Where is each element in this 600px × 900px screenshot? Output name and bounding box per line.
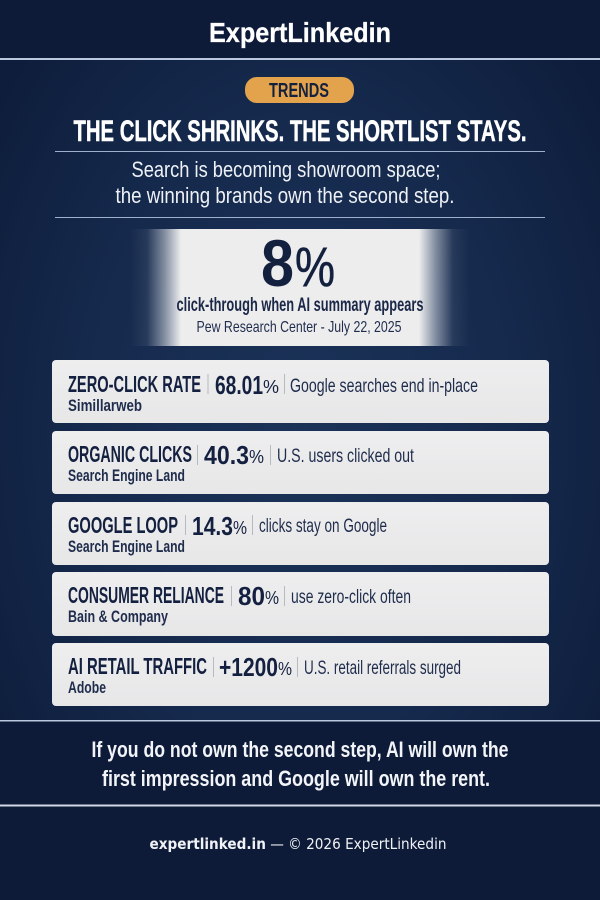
hero number: 8% <box>261 226 335 300</box>
hero source: Pew Research Center - July 22, 2025 <box>196 319 402 336</box>
stat card: zero-click rate: Google searches end in-place <box>290 376 478 397</box>
stat card: ai retail traffic <box>52 643 549 706</box>
stat card: organic clicks: 40.3 <box>204 440 249 470</box>
hero number: 8%: 8 <box>261 226 294 300</box>
stat card: ai retail traffic: % <box>278 659 292 679</box>
header band <box>0 0 600 58</box>
stat card: consumer reliance <box>52 572 549 636</box>
stat card: consumer reliance: Bain & Company <box>68 607 168 626</box>
stat card: zero-click rate: 68.01 <box>215 370 263 400</box>
stat card: google loop: % <box>233 518 247 538</box>
stat card: zero-click rate <box>52 360 549 423</box>
hero number: 8%: % <box>295 235 335 298</box>
stat card: organic clicks: Search Engine Land <box>68 466 185 485</box>
stat card: ai retail traffic: AI RETAIL TRAFFIC <box>68 653 207 679</box>
stat card: consumer reliance: % <box>265 588 279 608</box>
stat card: google loop: 14.3 <box>192 511 233 541</box>
subtitle: the winning brands own the second step. <box>116 183 454 208</box>
stat card: ai retail traffic: U.S. retail referrals surged <box>304 658 461 679</box>
stat card: zero-click rate: Simillarweb <box>68 396 142 415</box>
stat card: ai retail traffic: Adobe <box>68 678 106 697</box>
footer: expertlinked.in — © 2026 ExpertLinkedin <box>150 835 446 853</box>
stat card: organic clicks: ORGANIC CLICKS <box>68 441 192 467</box>
stat card: google loop: clicks stay on Google <box>259 516 387 537</box>
badge: trends <box>245 77 354 103</box>
stat card: organic clicks <box>52 431 549 494</box>
footer band <box>0 720 600 900</box>
hero stat panel <box>130 226 470 346</box>
badge: trends: TRENDS <box>269 80 329 102</box>
stat card: consumer reliance: CONSUMER RELIANCE <box>68 582 224 608</box>
closing statement <box>92 737 508 791</box>
hero label: click-through when AI summary appears <box>176 295 424 316</box>
stat card: zero-click rate: ZERO-CLICK RATE <box>68 371 201 397</box>
stat card: consumer reliance: use zero-click often <box>291 587 411 608</box>
stat card: consumer reliance: 80 <box>238 581 265 611</box>
logo wordmark: ExpertLinkedin <box>209 17 391 48</box>
stat card: google loop: Search Engine Land <box>68 537 185 556</box>
stat card: organic clicks: % <box>249 447 264 467</box>
stat card: google loop <box>52 502 549 565</box>
stat card: ai retail traffic: +1200 <box>219 652 278 682</box>
subtitle: Search is becoming showroom space; <box>132 157 440 182</box>
subtitle <box>116 157 454 208</box>
closing statement: If you do not own the second step, AI will own the <box>92 737 508 762</box>
closing statement: first impression and Google will own the rent. <box>102 766 490 791</box>
stat card: organic clicks: U.S. users clicked out <box>277 446 415 467</box>
stat card: zero-click rate: % <box>263 377 279 397</box>
stat card: google loop: GOOGLE LOOP <box>68 512 178 538</box>
